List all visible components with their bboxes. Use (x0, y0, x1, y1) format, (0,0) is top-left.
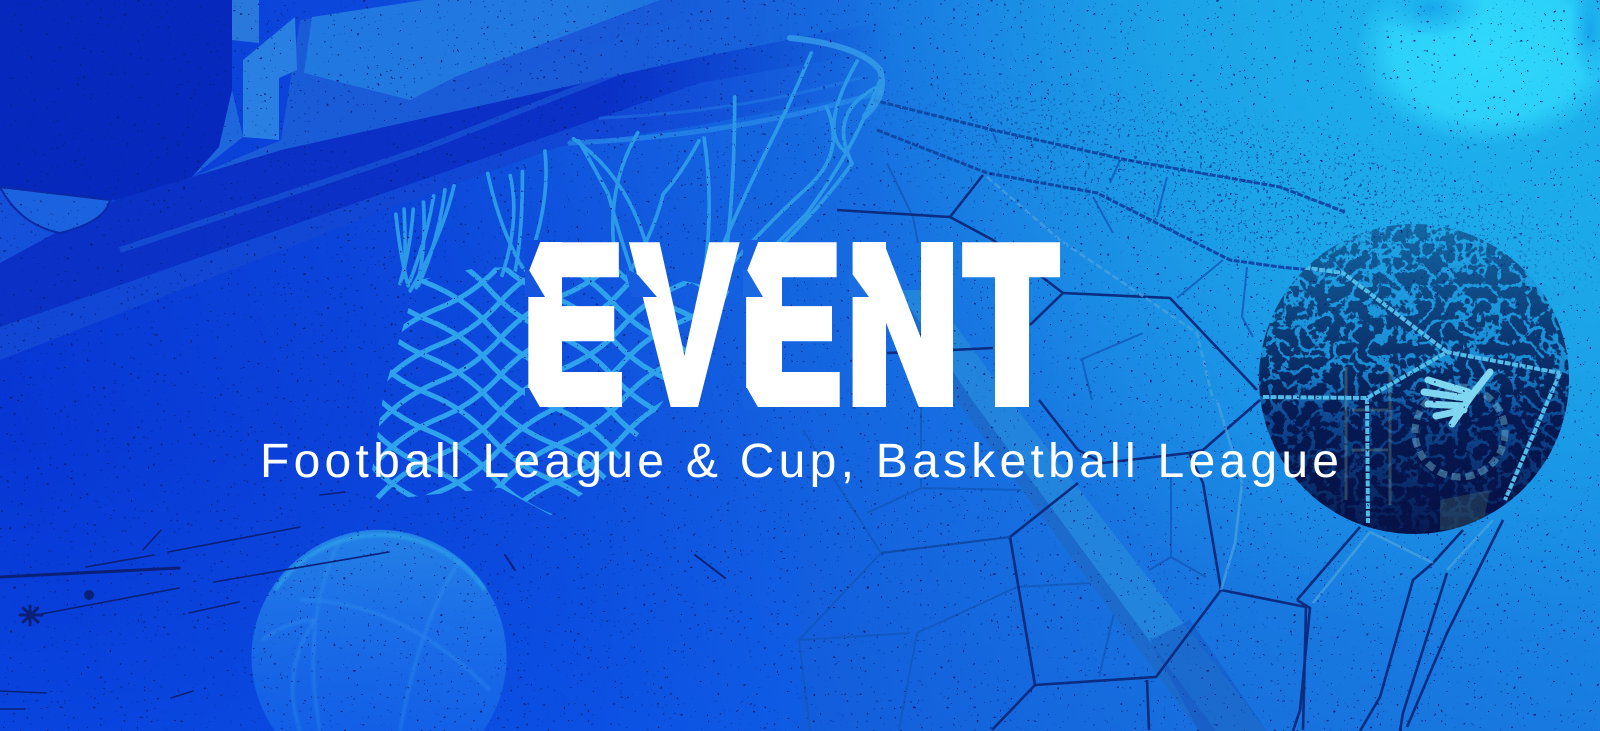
subtitle: Football League & Cup, Basketball League (260, 435, 1339, 488)
title: EVENT (521, 198, 1058, 450)
dense speckle band (869, 78, 1600, 292)
sky clouds (1355, 0, 1600, 145)
goal post (880, 290, 1267, 731)
light net strands (987, 177, 1493, 603)
soccer net lines (837, 100, 1503, 731)
backboard and support beam (0, 0, 890, 360)
backboard bracket (243, 17, 297, 140)
hand (1424, 372, 1490, 424)
title letter detailing (525, 240, 1029, 409)
ball net seams (1263, 266, 1562, 523)
basketball (252, 530, 506, 731)
olive panel (1346, 367, 1390, 505)
sun wheel (1415, 387, 1505, 477)
backboard dish (0, 187, 110, 233)
basketball rim (570, 38, 882, 143)
basketball net mesh (372, 267, 730, 516)
scratch marks (0, 492, 725, 709)
soccer net lines behind post (799, 133, 1253, 730)
basketball net strands (396, 53, 880, 291)
soccer ball (1230, 224, 1569, 534)
